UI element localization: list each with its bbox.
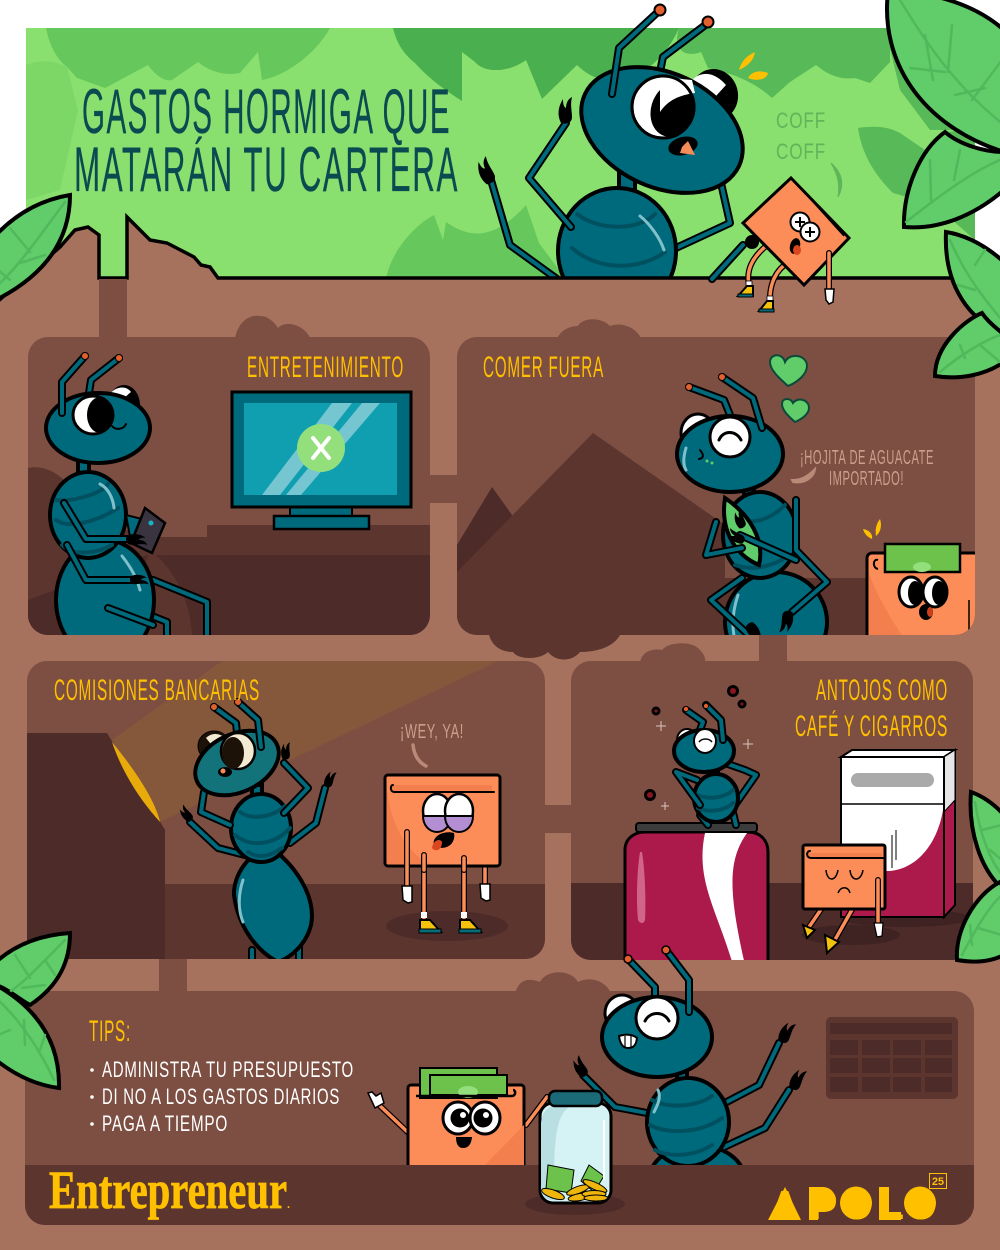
leaf: top right lower bbox=[904, 132, 1000, 227]
leaf: top left bbox=[0, 195, 70, 300]
infographic canvas: MATARÁN TU CARTERA bbox=[74, 135, 459, 205]
tips list: ADMINISTRA TU PRESUPUESTO bbox=[102, 1057, 354, 1082]
wallet back arm bbox=[712, 235, 759, 279]
atm machine bbox=[27, 733, 165, 959]
exclamation text: ¡WEY, YA! bbox=[400, 721, 464, 743]
floor bbox=[571, 883, 973, 960]
sky and foliage background bbox=[26, 28, 975, 280]
wallet fold bbox=[796, 183, 844, 236]
panel: comisiones bancarias bbox=[27, 661, 545, 965]
coughing text: COFF bbox=[776, 108, 826, 133]
happy ant bbox=[570, 946, 807, 1215]
worried ant bbox=[177, 698, 337, 965]
speech mark bbox=[413, 745, 426, 766]
wallet shadow bbox=[802, 925, 900, 945]
phone bbox=[126, 508, 165, 553]
money jar bbox=[540, 1091, 611, 1203]
leaf: mid right upper bbox=[971, 792, 1000, 890]
small wallet sitting on ledge bbox=[712, 178, 849, 312]
shadow bbox=[386, 911, 508, 941]
box shadow bbox=[840, 912, 966, 927]
cough mark bbox=[831, 163, 842, 197]
alarm marks bbox=[863, 519, 881, 539]
leaf: bottom left upper bbox=[0, 933, 70, 1005]
soda can bbox=[625, 823, 768, 965]
wallet body bbox=[743, 178, 849, 285]
ant front antenna bbox=[612, 4, 666, 94]
panel: comer fuera bbox=[457, 337, 975, 635]
ant back eye bbox=[686, 65, 742, 125]
coughing text: COFF bbox=[776, 139, 826, 164]
leaf: mid right lower bbox=[957, 882, 1000, 962]
dizzy ant bbox=[674, 704, 756, 825]
floating bubbles and sparkles bbox=[646, 686, 753, 810]
entrepreneur logo: . bbox=[287, 1197, 290, 1211]
panel: antojos bbox=[571, 661, 973, 965]
ant legs bbox=[491, 180, 730, 279]
ant with phone bbox=[46, 352, 207, 660]
tips list: DI NO A LOS GASTOS DIARIOS bbox=[102, 1084, 340, 1109]
wallet front arm bbox=[825, 253, 834, 304]
tips list: PAGA A TIEMPO bbox=[102, 1111, 228, 1136]
tips list bbox=[90, 1057, 354, 1136]
speech mark bbox=[792, 469, 815, 482]
apolo logo: 25 bbox=[932, 1176, 944, 1188]
happy wallet bbox=[368, 1068, 547, 1170]
panel: tips bbox=[25, 946, 974, 1228]
cigarette box bbox=[841, 750, 955, 917]
jar shadow bbox=[525, 1193, 625, 1215]
mountains bbox=[457, 433, 975, 640]
leaf: top right large bbox=[887, 0, 1000, 152]
apolo logo: APOLO bbox=[770, 1182, 937, 1228]
tired wallet bbox=[385, 775, 500, 933]
tunnels and panel bumps bbox=[99, 279, 787, 995]
comment text bbox=[801, 450, 933, 485]
panel: entretenimiento bbox=[28, 337, 430, 660]
leaf: right lower bbox=[935, 313, 1000, 377]
ant raised arm bbox=[474, 97, 572, 227]
panel title: comisiones bancarias: COMISIONES BANCARIAS bbox=[54, 674, 260, 707]
main ant coughing bbox=[474, 4, 763, 314]
ant antenna back bbox=[660, 16, 714, 72]
room floor bbox=[28, 467, 430, 635]
tips heading: TIPS: bbox=[89, 1015, 131, 1048]
comment text: IMPORTADO! bbox=[829, 468, 904, 490]
hearts bbox=[770, 355, 809, 422]
leaf: right upper bbox=[946, 232, 1000, 335]
wallet with money bbox=[867, 544, 979, 643]
coughing text bbox=[776, 108, 826, 164]
ant head bbox=[561, 42, 763, 218]
leaf: bottom left lower bbox=[0, 985, 59, 1088]
ant front eye bbox=[632, 76, 700, 142]
title bbox=[74, 77, 459, 205]
light cone bbox=[112, 661, 498, 822]
infographic canvas: GASTOS HORMIGA QUE bbox=[82, 77, 451, 147]
ant thorax bbox=[558, 170, 676, 314]
tv bbox=[232, 392, 411, 529]
ant with leaf bbox=[677, 374, 827, 672]
panel title: comer fuera: COMER FUERA bbox=[483, 351, 604, 384]
panel title: antojos bbox=[795, 674, 948, 743]
leaf in hands bbox=[724, 498, 760, 565]
floor bbox=[165, 884, 545, 959]
sad wallet bbox=[803, 845, 885, 953]
ant mouth bbox=[666, 133, 700, 159]
panel title: entretenimiento: ENTRETENIMIENTO bbox=[247, 351, 404, 384]
window bbox=[826, 1017, 958, 1099]
wallet face bbox=[788, 212, 820, 255]
footer bar bbox=[25, 1165, 974, 1225]
entrepreneur logo: Entrepreneur bbox=[49, 1160, 287, 1220]
alarm marks bbox=[739, 52, 768, 80]
wallet legs bbox=[738, 246, 789, 312]
